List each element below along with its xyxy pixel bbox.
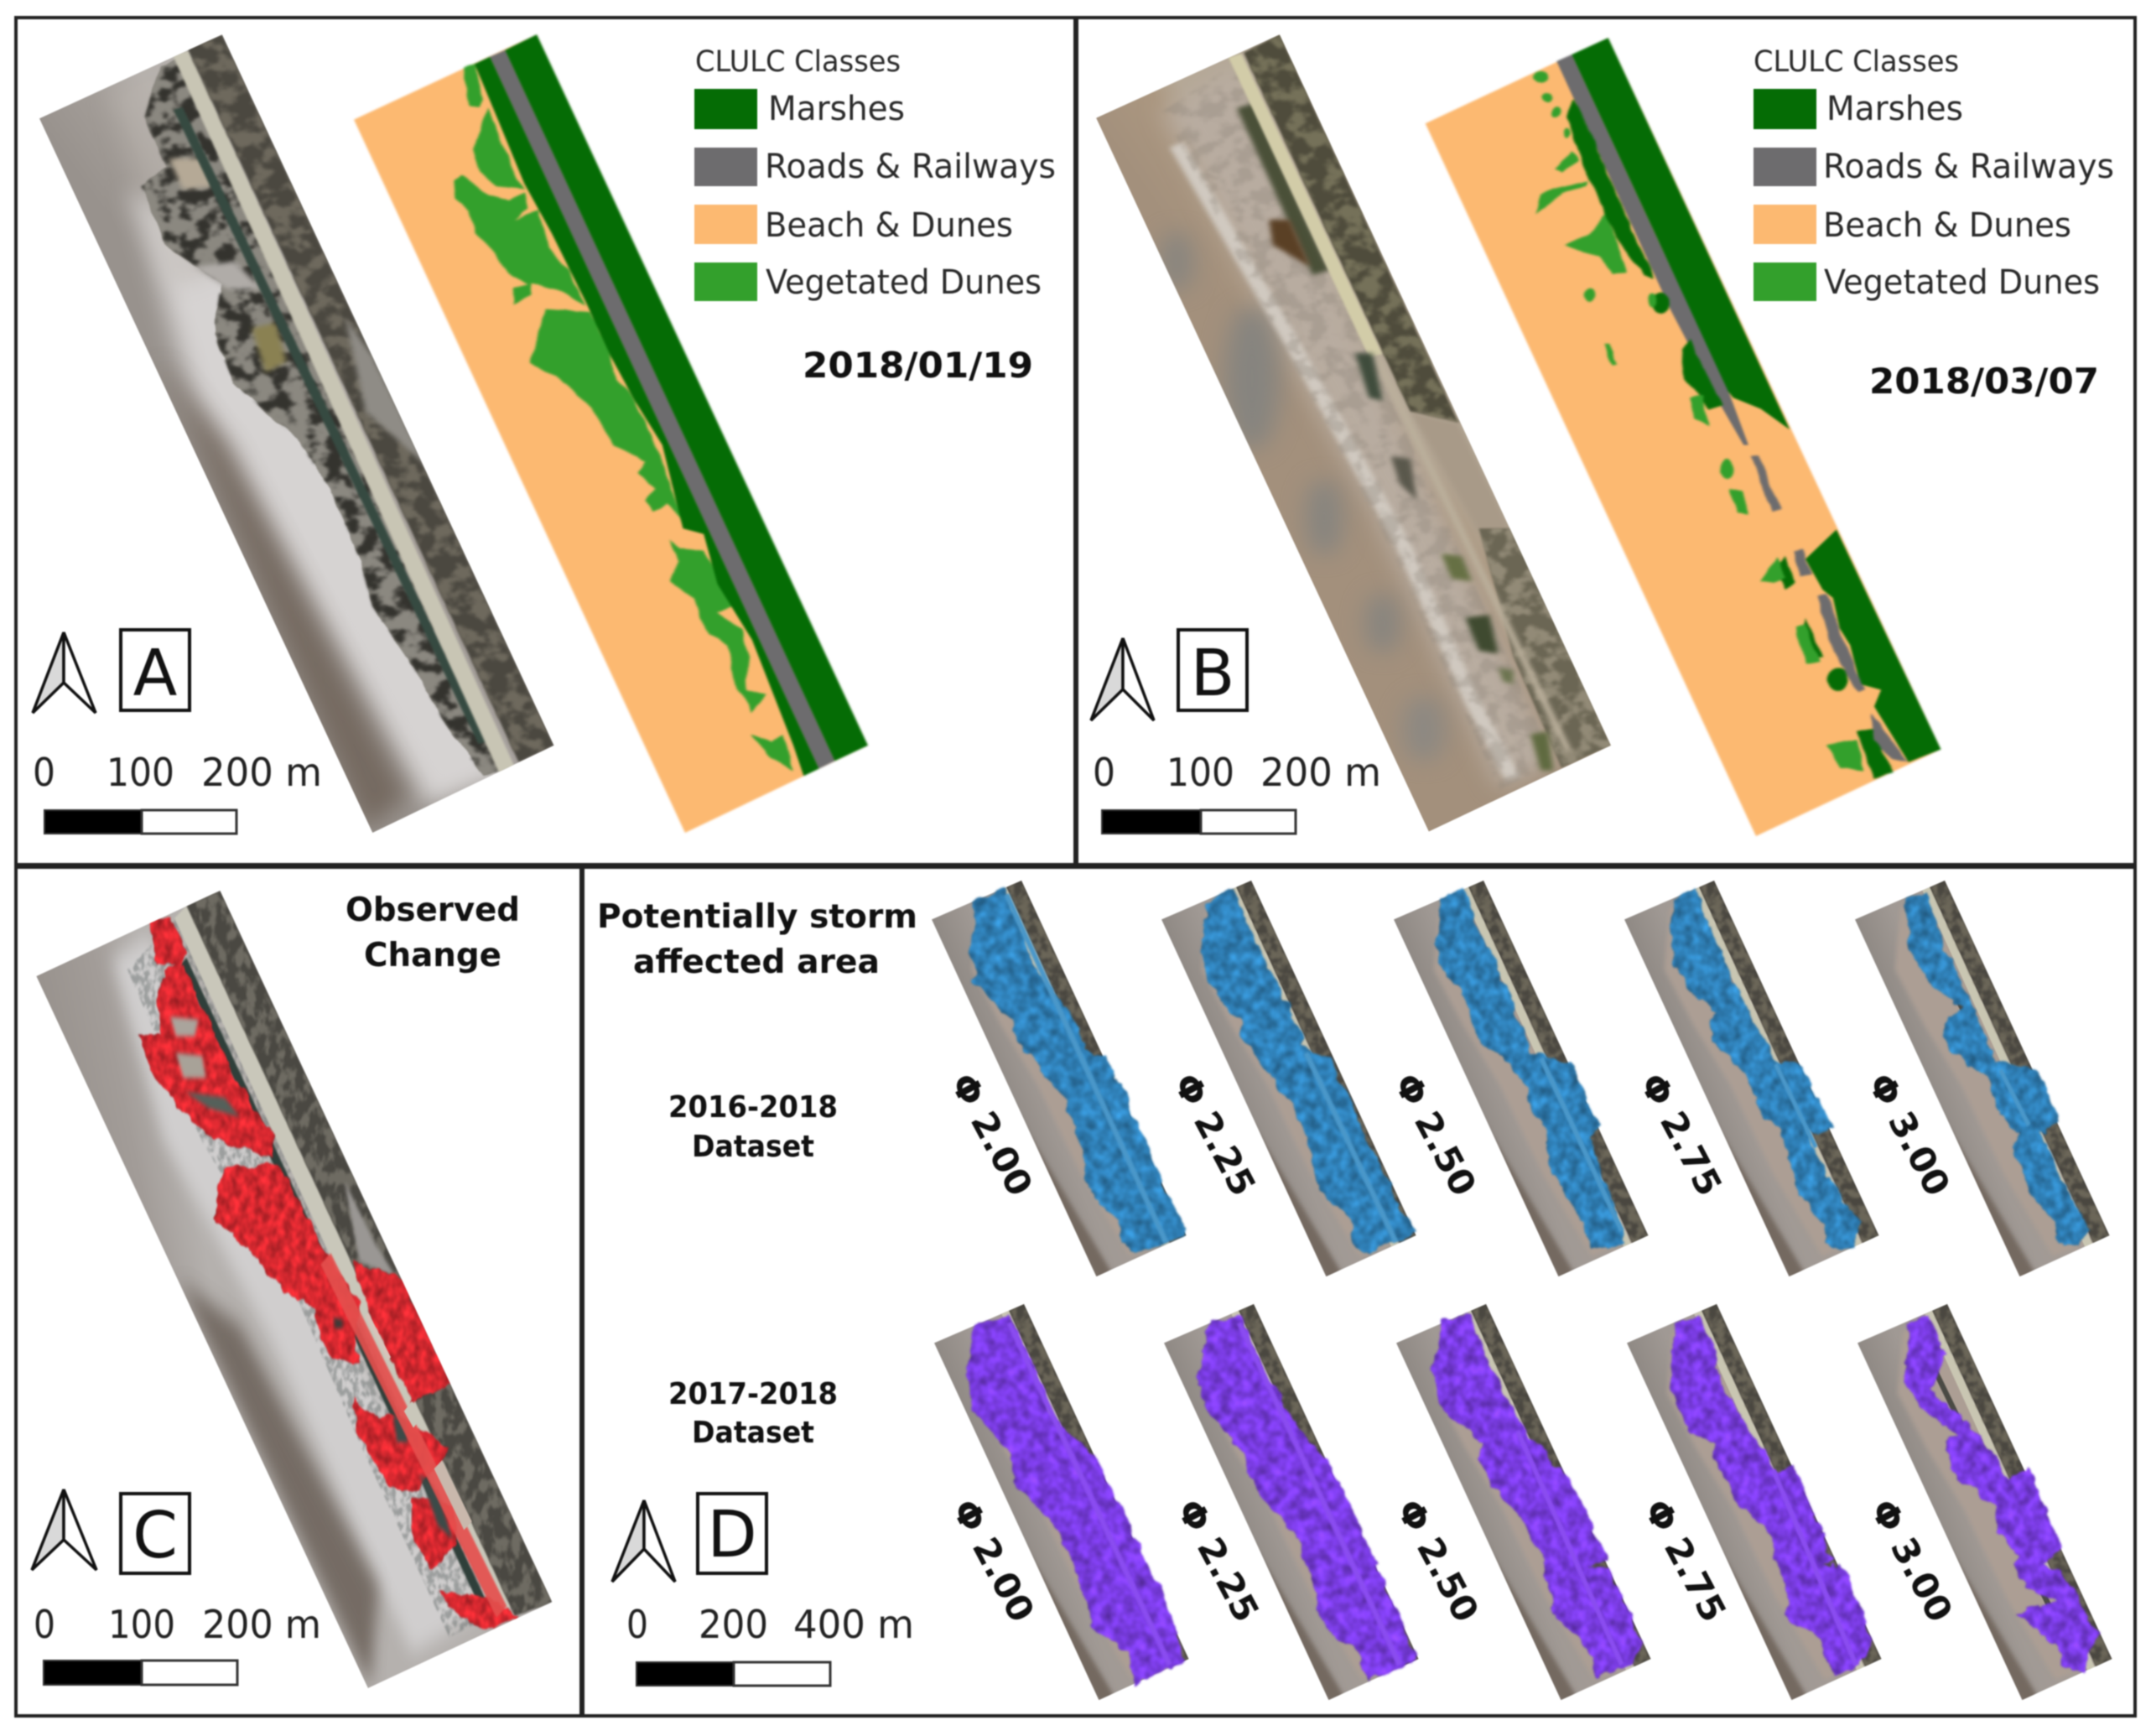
- thumbnail: 2016-2018 phi 3.00: [1855, 881, 2110, 1278]
- thumbnail: 2016-2018 phi 2.00: [932, 881, 1187, 1278]
- thumbnail: 2016-2018 phi 2.25: [1161, 881, 1416, 1278]
- CLULC map B: [1426, 38, 1941, 836]
- scale bar B: 200 m: [1260, 750, 1381, 795]
- legend A: CLULC Classes: [695, 45, 901, 79]
- north arrow A: [33, 632, 96, 713]
- row label: 2017-2018 dataset: [668, 1377, 838, 1450]
- legend A: Vegetated Dunes: [766, 263, 1042, 302]
- scale bar B: 100: [1166, 750, 1234, 795]
- row label: 2016-2018 dataset: [668, 1090, 838, 1164]
- threshold labels, top row: Φ 2.00: [943, 1067, 1041, 1203]
- north arrow B: [1091, 638, 1154, 720]
- heading: potentially storm affected area: affected area: [633, 943, 880, 981]
- panel C: observed change: [16, 867, 581, 1716]
- legend B: [1754, 45, 2114, 302]
- thumbnail: 2016-2018 phi 2.75: [1624, 881, 1879, 1278]
- threshold labels, top row: Φ 3.00: [1860, 1067, 1958, 1203]
- label D: D: [707, 1498, 757, 1572]
- heading: potentially storm affected area: Potentially storm: [597, 898, 917, 936]
- scale bar A: 0: [33, 750, 55, 795]
- row label: 2016-2018 dataset: 2016-2018: [668, 1090, 838, 1125]
- label B: [1178, 630, 1247, 711]
- north arrow C: [32, 1489, 96, 1570]
- thumbnail: 2017-2018 phi 3.00: [1857, 1304, 2112, 1702]
- scale bar D: 0: [626, 1602, 648, 1647]
- legend B: CLULC Classes: [1754, 45, 1959, 79]
- threshold labels, bottom row: Φ 2.00: [944, 1493, 1042, 1629]
- thumbnail: 2017-2018 phi 2.75: [1627, 1304, 1882, 1702]
- scale bar A: [33, 750, 322, 834]
- scale bar A: 200 m: [201, 750, 322, 795]
- scale bar D: 200: [699, 1602, 768, 1647]
- scale bar D: [626, 1602, 914, 1686]
- panel A: 2018/01/19 classification: [16, 18, 1075, 865]
- legend B: Beach & Dunes: [1823, 206, 2071, 245]
- legend A: Roads & Railways: [765, 148, 1056, 186]
- scale bar B: 0: [1093, 750, 1115, 795]
- legend A: Beach & Dunes: [765, 206, 1013, 245]
- threshold labels, bottom row: Φ 2.75: [1636, 1493, 1734, 1629]
- panel D: potentially storm affected area: [583, 867, 2135, 1716]
- row label: 2016-2018 dataset: Dataset: [692, 1130, 814, 1164]
- heading: observed change: Change: [364, 937, 501, 975]
- row label: 2017-2018 dataset: Dataset: [692, 1416, 814, 1450]
- legend A: [694, 45, 1056, 302]
- threshold labels, top row: [943, 1067, 1958, 1203]
- orthophoto B: [1096, 34, 1611, 832]
- date A: 2018/01/19: [803, 345, 1033, 386]
- label C: [121, 1494, 190, 1573]
- heading: observed change: [346, 891, 520, 975]
- label A: [121, 630, 190, 711]
- threshold labels, bottom row: Φ 2.50: [1389, 1493, 1487, 1629]
- date B: 2018/03/07: [1869, 361, 2099, 402]
- thumbnail: 2017-2018 phi 2.50: [1396, 1304, 1651, 1702]
- heading: observed change: Observed: [346, 891, 520, 929]
- thumbnail: 2017-2018 phi 2.25: [1164, 1304, 1419, 1702]
- legend B: Roads & Railways: [1823, 148, 2114, 186]
- CLULC map A: [354, 34, 868, 833]
- legend B: Vegetated Dunes: [1824, 263, 2100, 302]
- scale bar C: 200 m: [202, 1602, 321, 1647]
- row label: 2017-2018 dataset: 2017-2018: [668, 1377, 838, 1411]
- thumbnail: 2016-2018 phi 2.50: [1394, 881, 1649, 1278]
- orthophoto A: [39, 34, 554, 833]
- scale bar C: 100: [108, 1602, 175, 1647]
- label B: B: [1191, 637, 1234, 711]
- red change areas: [138, 917, 520, 1631]
- legend B: Marshes: [1826, 90, 1963, 128]
- thumbnail: 2017-2018 phi 2.00: [934, 1304, 1189, 1702]
- heading: potentially storm affected area: [597, 898, 917, 981]
- scale bar D: 400 m: [793, 1602, 914, 1647]
- threshold labels, bottom row: Φ 3.00: [1863, 1493, 1961, 1629]
- scale bar B: [1093, 750, 1381, 834]
- scale bar A: 100: [107, 750, 174, 795]
- label D: [698, 1494, 766, 1573]
- north arrow D: [612, 1500, 675, 1582]
- threshold labels, top row: Φ 2.50: [1386, 1067, 1484, 1203]
- label A: A: [133, 637, 178, 711]
- label C: C: [132, 1499, 178, 1573]
- orthophoto with red change overlay: [36, 891, 552, 1688]
- panel B: 2018/03/07 classification: [1077, 18, 2135, 865]
- scale bar C: 0: [34, 1602, 55, 1647]
- threshold labels, bottom row: [944, 1493, 1961, 1629]
- threshold labels, top row: Φ 2.25: [1166, 1067, 1264, 1203]
- scale bar C: [34, 1602, 321, 1685]
- threshold labels, top row: Φ 2.75: [1632, 1067, 1730, 1203]
- legend A: Marshes: [768, 90, 905, 128]
- threshold labels, bottom row: Φ 2.25: [1169, 1493, 1267, 1629]
